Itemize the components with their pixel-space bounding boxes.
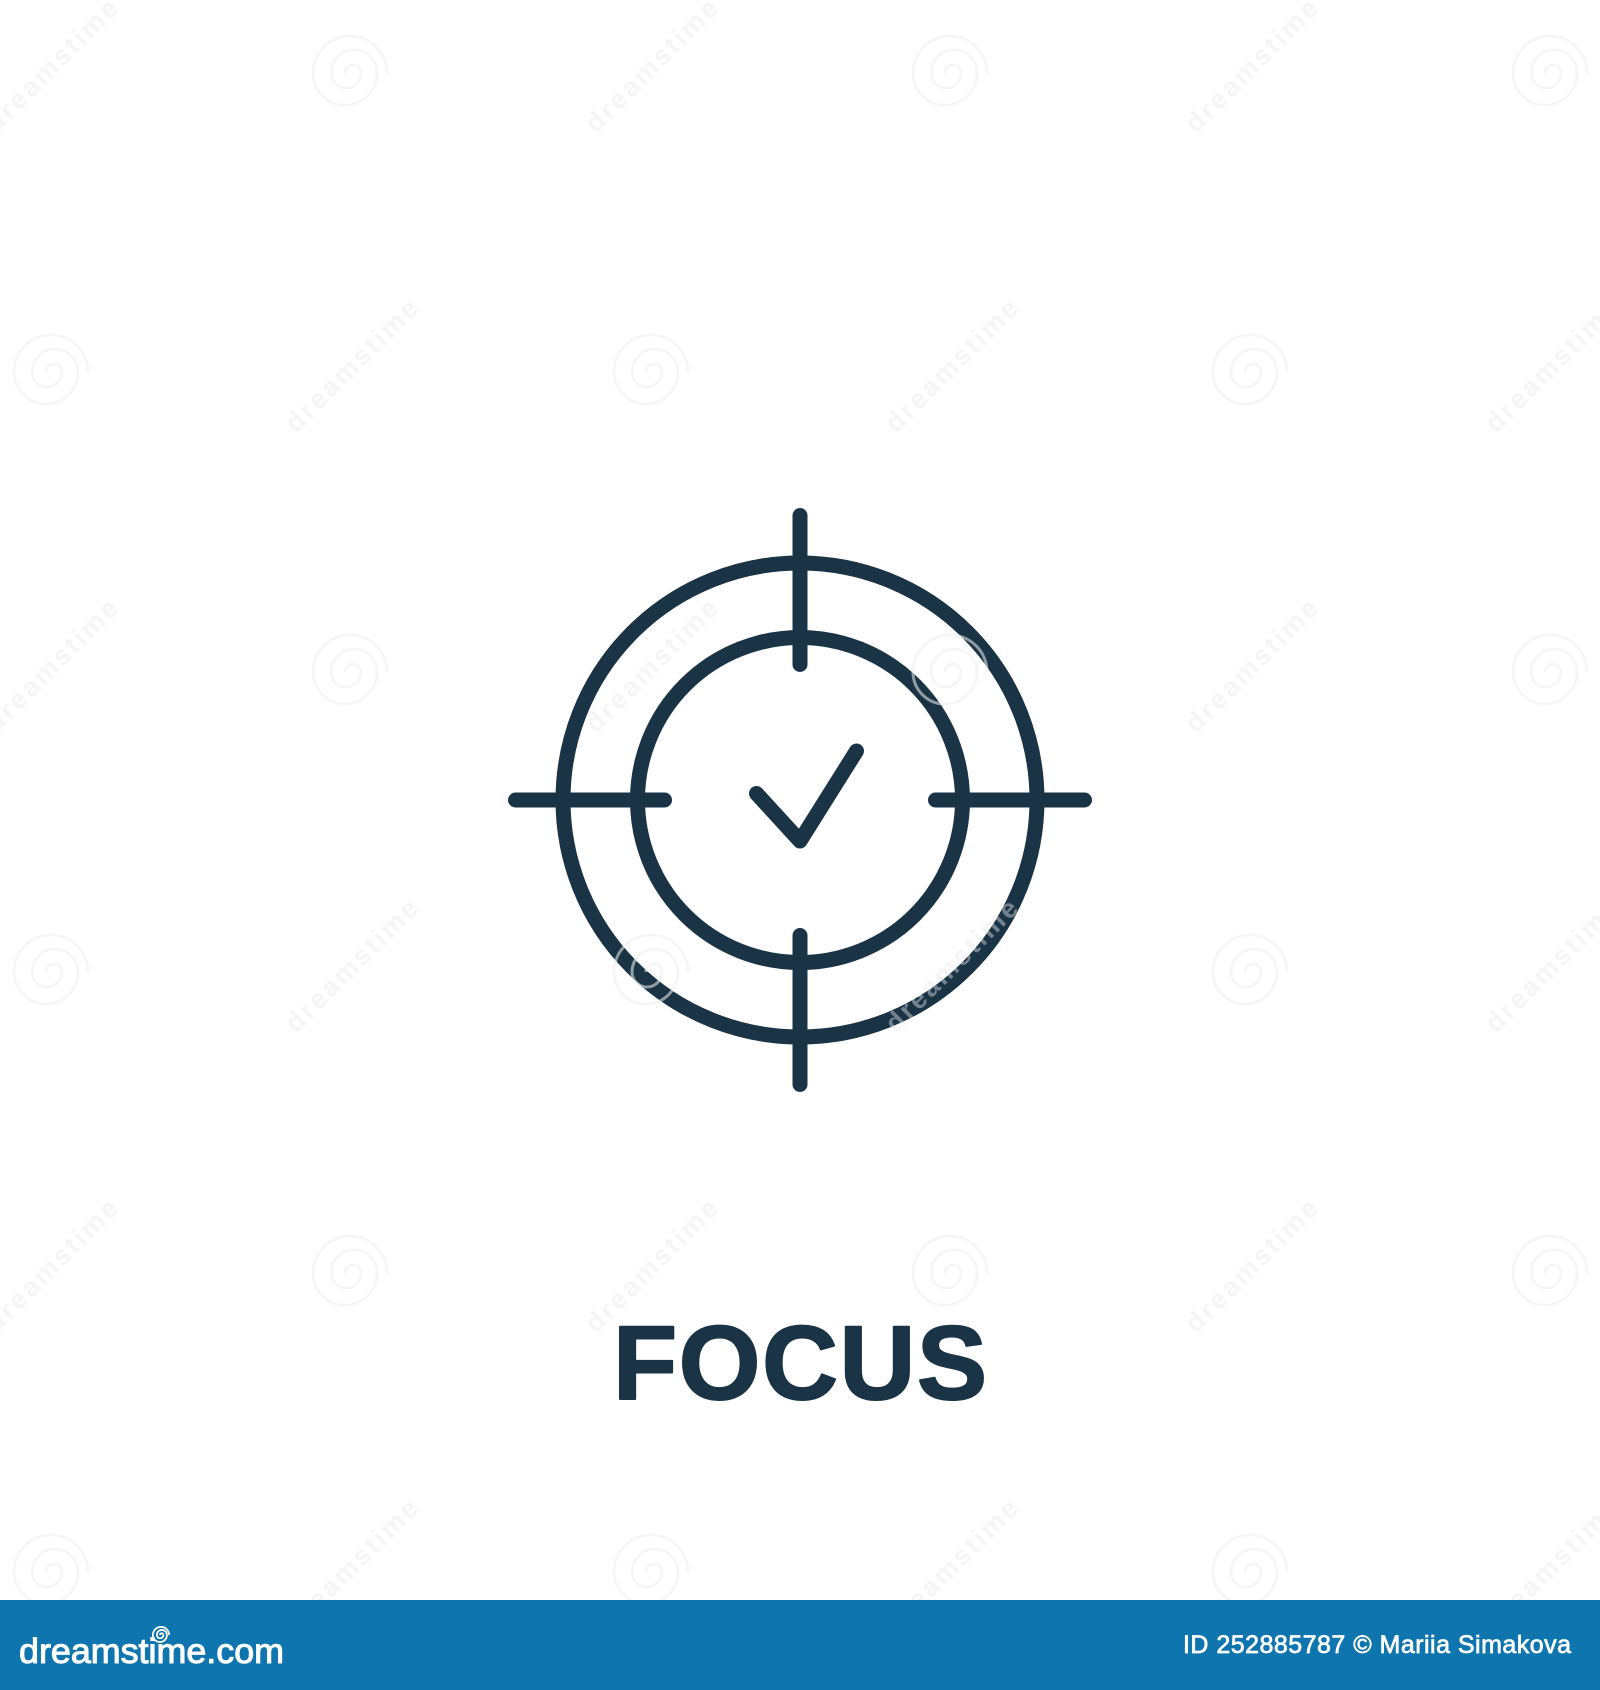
- watermark pattern: dreamstime: [279, 893, 424, 1038]
- watermark pattern: dreamstime: [1179, 593, 1324, 738]
- watermark pattern: dreamstime: [579, 593, 724, 738]
- watermark pattern: dreamstime: [1179, 1193, 1324, 1338]
- footer logo: dreamstime.com: dreamstime.com: [19, 1632, 284, 1671]
- watermark overlay on icon: dreamstime: [879, 893, 1024, 1038]
- watermark pattern: dreamstime: [279, 293, 424, 438]
- watermark pattern: dreamstime: [579, 1193, 724, 1338]
- watermark pattern: dreamstime: [879, 893, 1024, 1038]
- watermark pattern: dreamstime: [879, 293, 1024, 438]
- footer bar: [0, 1600, 1600, 1690]
- watermark overlay on icon: [614, 635, 1024, 1038]
- icon: target crosshair with check mark: [516, 516, 1084, 1084]
- title: FOCUS: FOCUS: [613, 1305, 987, 1422]
- footer credit: ID 252885787 © Mariia Simakova: [1183, 1631, 1571, 1659]
- watermark pattern: dreamstime: [279, 1493, 424, 1638]
- watermark pattern: dreamstime: [879, 1493, 1024, 1638]
